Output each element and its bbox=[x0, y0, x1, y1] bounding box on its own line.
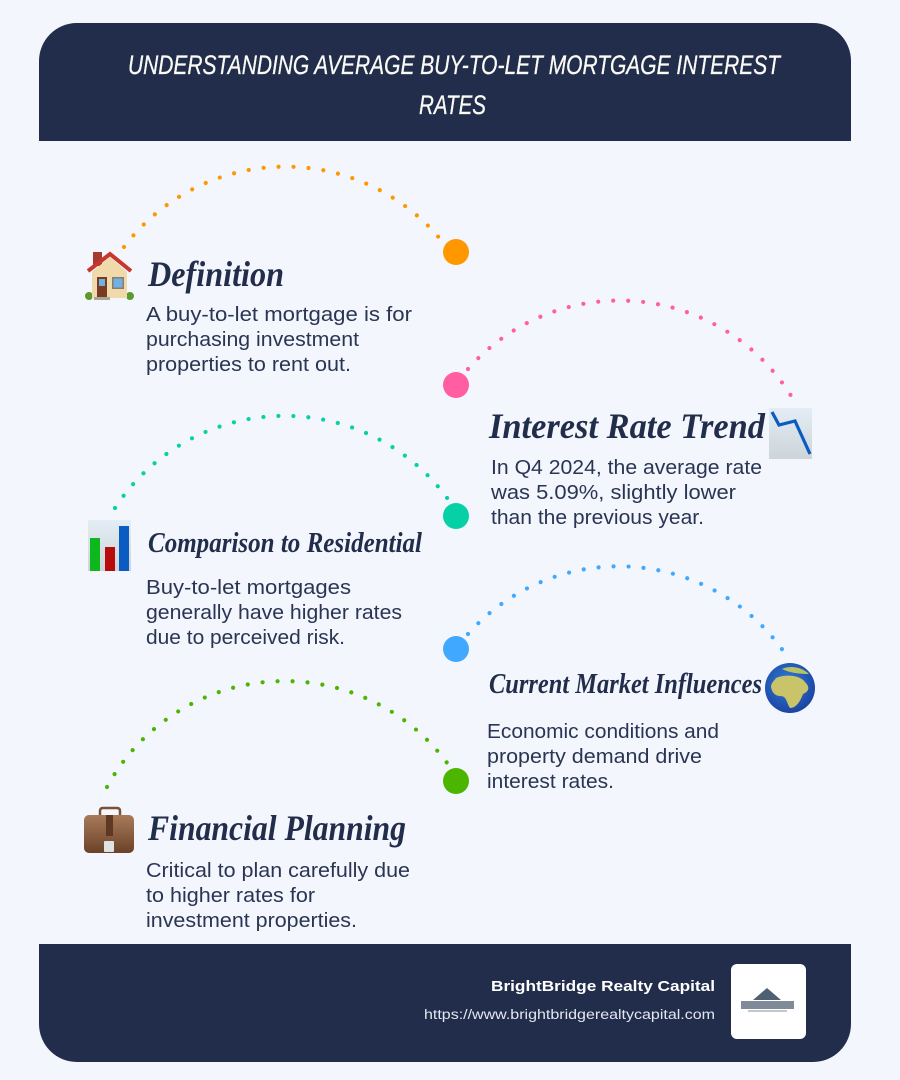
text: definition description: A buy-to-let mortgage is for bbox=[146, 304, 412, 326]
heading: comparison to residential: Comparison to Residential bbox=[148, 528, 422, 559]
text: comparison description: generally have higher rates bbox=[146, 602, 402, 624]
text: interest rate description: In Q4 2024, the average rate bbox=[491, 457, 762, 479]
section: comparison to residential bbox=[88, 416, 469, 649]
text: interest rate description: than the previous year. bbox=[491, 507, 704, 529]
text: definition description: properties to rent out. bbox=[146, 354, 351, 376]
heading: definition: Definition bbox=[147, 254, 284, 294]
text: market influences description: Economic conditions and bbox=[487, 721, 719, 743]
text: interest rate description bbox=[490, 457, 762, 529]
text: definition description: purchasing investment bbox=[146, 329, 359, 351]
text: financial planning description: Critical to plan carefully due bbox=[146, 860, 410, 882]
header banner with title: RATES bbox=[419, 90, 486, 120]
icon: falling chart bbox=[769, 408, 812, 459]
heading: interest rate trend: Interest Rate Trend bbox=[488, 406, 766, 446]
text: market influences description bbox=[487, 721, 719, 793]
company url: https://www.brightbridgerealtycapital.com bbox=[424, 1007, 715, 1022]
section: interest rate trend bbox=[443, 301, 812, 529]
header banner with title bbox=[39, 23, 851, 141]
company name: BrightBridge Realty Capital bbox=[491, 978, 715, 995]
text: comparison description bbox=[146, 577, 402, 649]
text: market influences description: property demand drive bbox=[487, 746, 702, 768]
text: financial planning description: to higher rates for bbox=[146, 885, 315, 907]
text: financial planning description bbox=[146, 860, 410, 932]
section: financial planning bbox=[84, 681, 469, 932]
section: current market influences bbox=[443, 566, 815, 793]
footer banner bbox=[39, 944, 851, 1062]
text: comparison description: Buy-to-let mortgages bbox=[146, 577, 351, 599]
heading: financial planning: Financial Planning bbox=[147, 808, 406, 848]
text: comparison description: due to perceived risk. bbox=[146, 627, 345, 649]
section: definition bbox=[85, 167, 469, 376]
text: financial planning description: investment properties. bbox=[146, 910, 357, 932]
text: interest rate description: was 5.09%, slightly lower bbox=[490, 482, 736, 504]
icon: house bbox=[85, 252, 134, 300]
text: market influences description: interest rates. bbox=[487, 771, 614, 793]
icon: bar chart bbox=[88, 520, 131, 571]
heading: current market influences: Current Market Influences bbox=[489, 669, 762, 700]
icon: globe bbox=[765, 663, 815, 713]
company logo bbox=[731, 964, 806, 1039]
icon: briefcase bbox=[84, 808, 134, 853]
text: definition description bbox=[146, 304, 412, 376]
